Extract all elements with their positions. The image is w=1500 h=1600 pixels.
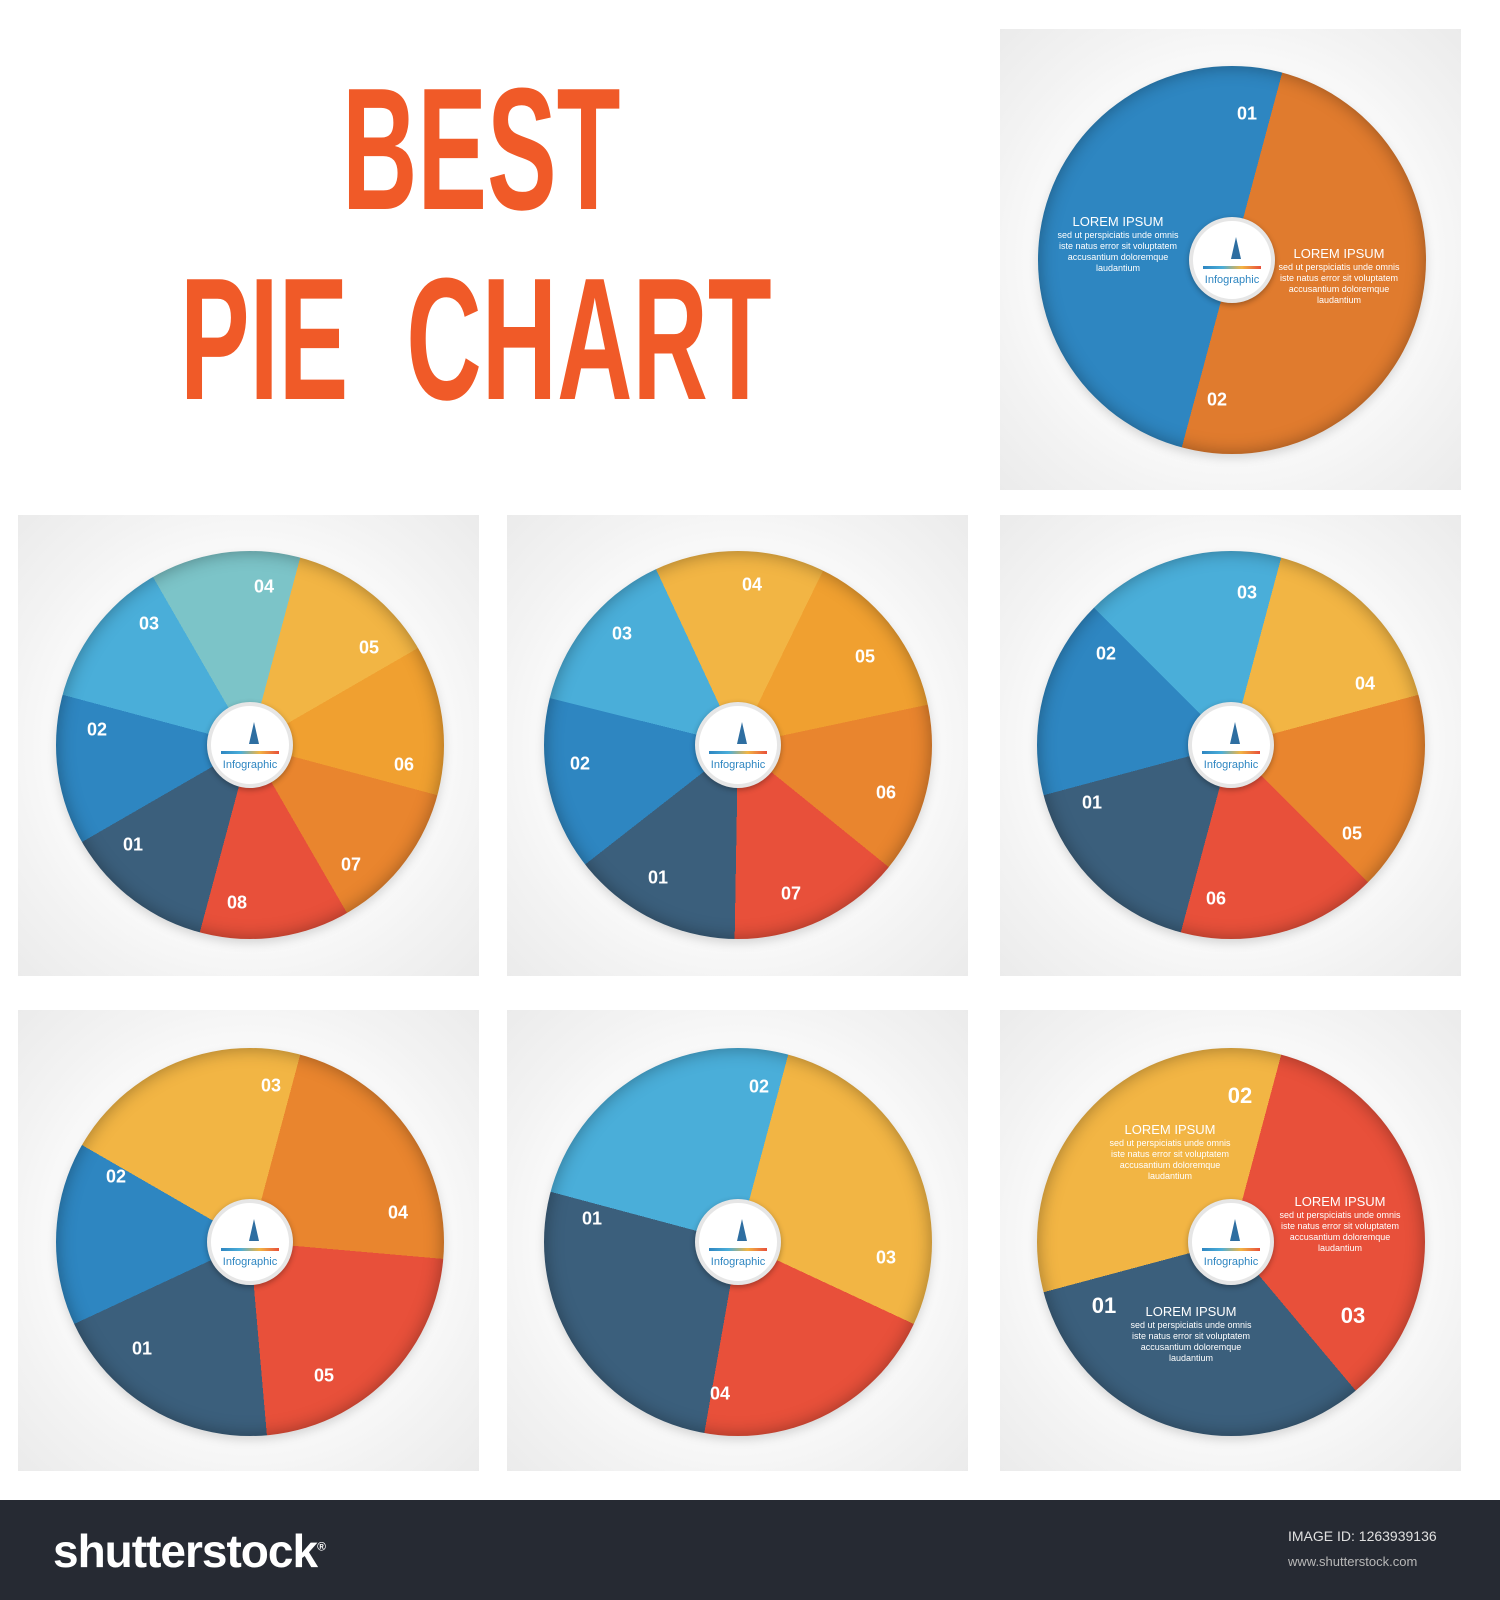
text: 06 <box>876 782 896 802</box>
text: LOREM IPSUM <box>1294 1194 1386 1209</box>
hub 7: Infographic <box>711 759 765 771</box>
numbers chart 8 <box>87 576 414 912</box>
text: 01 <box>123 834 143 854</box>
hub 1 <box>1189 217 1275 303</box>
title: PIE CHART <box>180 241 772 436</box>
text: 08 <box>227 892 247 912</box>
text: 03 <box>139 614 159 634</box>
text: 02 <box>1228 1083 1252 1108</box>
panel: 6 segments <box>1000 515 1461 976</box>
footer id: www.shutterstock.com <box>1288 1554 1417 1569</box>
text: 03 <box>876 1248 896 1268</box>
text: 05 <box>855 646 875 666</box>
hub 5 <box>207 1199 293 1285</box>
text: 01 <box>132 1338 152 1358</box>
footer <box>0 1500 1500 1600</box>
chart: 2 segments <box>1038 66 1426 454</box>
text: 05 <box>1342 824 1362 844</box>
hub 8: Infographic <box>223 759 277 771</box>
hub 3 <box>1188 1199 1274 1285</box>
text: 03 <box>261 1076 281 1096</box>
text: 04 <box>388 1202 408 1222</box>
hub 4: Infographic <box>711 1256 765 1268</box>
text: sed ut perspiciatis unde omnis iste natus error sit voluptatem accusantium doloremque laudantium <box>1279 1210 1401 1253</box>
text: LOREM IPSUM <box>1145 1304 1236 1319</box>
text: 07 <box>341 854 361 874</box>
hub 7 <box>695 702 781 788</box>
numbers chart 6 <box>1082 582 1375 908</box>
text: 01 <box>582 1208 602 1228</box>
chart: 5 segments <box>56 1048 444 1436</box>
panel: 3 segments <box>1000 1010 1461 1471</box>
title: BEST <box>342 51 620 246</box>
numbers chart 5 <box>106 1076 408 1386</box>
text: LOREM IPSUM <box>1293 246 1384 261</box>
chart: 3 segments <box>1037 1048 1425 1436</box>
text: sed ut perspiciatis unde omnis iste natus error sit voluptatem accusantium doloremque laudantium <box>1130 1320 1252 1363</box>
text: 03 <box>1341 1303 1365 1328</box>
text: LOREM IPSUM <box>1072 214 1164 229</box>
hub 4 <box>695 1199 781 1285</box>
chart: 6 segments <box>1037 551 1425 939</box>
panel: 4 segments <box>507 1010 968 1471</box>
text: 06 <box>394 754 414 774</box>
numbers chart 4 <box>582 1076 896 1404</box>
text: 02 <box>87 720 107 740</box>
hub 5: Infographic <box>223 1256 277 1268</box>
panel: 7 segments <box>507 515 968 976</box>
text: sed ut perspiciatis unde omnis iste natus error sit voluptatem accusantium doloremque laudantium <box>1109 1138 1231 1181</box>
footer logo: shutterstock® <box>53 1525 325 1577</box>
hub 6 <box>1188 702 1274 788</box>
numbers chart 3 <box>1092 1083 1401 1363</box>
numbers chart 1 <box>1057 104 1400 410</box>
hub 3: Infographic <box>1204 1256 1258 1268</box>
numbers chart 7 <box>570 574 896 904</box>
text: LOREM IPSUM <box>1124 1122 1216 1137</box>
text: 01 <box>1082 792 1102 812</box>
hub 8 <box>207 702 293 788</box>
panel: 5 segments <box>18 1010 479 1471</box>
chart: 7 segments <box>544 551 932 939</box>
text: 05 <box>314 1366 334 1386</box>
text: 04 <box>742 574 762 594</box>
text: 02 <box>1096 644 1116 664</box>
panel: 8 segments <box>18 515 479 976</box>
text: 01 <box>1092 1293 1116 1318</box>
hub 1: Infographic <box>1205 274 1259 286</box>
text: 02 <box>570 754 590 774</box>
text: 04 <box>710 1384 730 1404</box>
chart: 8 segments <box>56 551 444 939</box>
text: 03 <box>612 624 632 644</box>
text: 03 <box>1237 582 1257 602</box>
title <box>180 51 772 436</box>
text: 02 <box>749 1076 769 1096</box>
hub 6: Infographic <box>1204 759 1258 771</box>
footer id: IMAGE ID: 1263939136 <box>1288 1528 1437 1544</box>
text: 04 <box>254 576 274 596</box>
text: sed ut perspiciatis unde omnis iste natus error sit voluptatem accusantium doloremque laudantium <box>1057 230 1179 273</box>
chart: 4 segments <box>544 1048 932 1436</box>
text: 02 <box>1207 390 1227 410</box>
footer id <box>1288 1528 1437 1569</box>
text: 01 <box>648 868 668 888</box>
text: 02 <box>106 1166 126 1186</box>
text: 01 <box>1237 104 1257 124</box>
text: 04 <box>1355 674 1375 694</box>
text: 05 <box>359 638 379 658</box>
text: 07 <box>781 884 801 904</box>
text: 06 <box>1206 888 1226 908</box>
text: sed ut perspiciatis unde omnis iste natus error sit voluptatem accusantium doloremque laudantium <box>1278 262 1400 305</box>
panel: 2 segments <box>1000 29 1461 490</box>
